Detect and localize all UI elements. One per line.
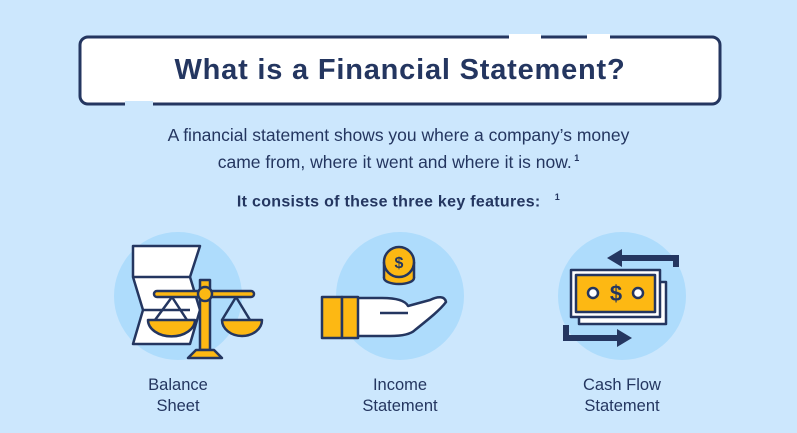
label: balance sheet: Balance <box>148 376 208 394</box>
label: income statement: Statement <box>362 397 438 415</box>
label: cash flow statement: Cash Flow <box>583 376 661 394</box>
title: What is a Financial Statement? <box>174 54 626 86</box>
icon: balance sheet <box>114 232 264 360</box>
label: balance sheet: Sheet <box>156 397 200 415</box>
icon: cash flow <box>558 232 686 360</box>
icon: cash flow: $ <box>610 281 622 306</box>
intro text: A financial statement shows you where a company’s money <box>168 125 629 145</box>
intro text <box>168 125 630 172</box>
icon: income statement: $ <box>395 255 404 272</box>
label: balance sheet <box>148 376 208 415</box>
subheading: It consists of these three key features: 1 <box>237 192 560 210</box>
label: income statement <box>362 376 438 415</box>
icon: income statement <box>320 232 464 360</box>
label: income statement: Income <box>373 376 427 394</box>
label: cash flow statement <box>583 376 661 415</box>
intro text: came from, where it went and where it is now. 1 <box>218 152 579 172</box>
label: cash flow statement: Statement <box>584 397 660 415</box>
